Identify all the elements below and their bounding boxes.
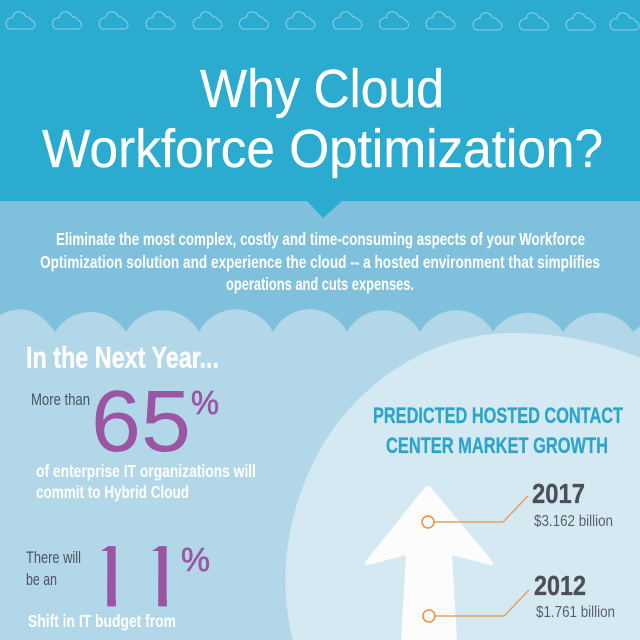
heading: predicted market growth (373, 403, 623, 458)
stat: 11 percent: % (181, 541, 210, 578)
callout: 2017: 2017 (532, 478, 585, 509)
stat: 65 percent: commit to Hybrid Cloud (36, 482, 189, 502)
stat: 11 percent: 1 (137, 529, 185, 625)
panel: scalloped cloud body (0, 309, 640, 640)
row of cloud icons (6, 12, 639, 30)
title (42, 59, 603, 179)
heading: in the next year: In the Next Year... (26, 342, 219, 374)
stat: 65 percent (31, 373, 256, 502)
intro paragraph: operations and cuts expenses. (226, 274, 414, 294)
panel: market growth circle (286, 333, 640, 640)
stat: 11 percent: Shift in IT budget from (28, 611, 176, 631)
icon: growth arrow (365, 486, 493, 640)
stat: 65 percent: % (191, 384, 219, 421)
callout: 2012: $1.761 billion (536, 604, 615, 621)
stat: 11 percent: There will (26, 548, 81, 567)
panel: intro band (0, 195, 640, 335)
stat: 11 percent: be an (26, 570, 57, 589)
stat: 65 percent: More than (31, 390, 90, 409)
callout: 2017 (422, 478, 613, 530)
intro paragraph (40, 229, 600, 294)
callout: 2012 (423, 570, 615, 622)
title: Workforce Optimization? (42, 119, 603, 179)
callout: 2012: 2012 (534, 570, 586, 601)
title: Why Cloud (200, 59, 444, 119)
panel: header band (0, 0, 640, 218)
stat: 11 percent (26, 529, 210, 631)
stat: 65 percent: of enterprise IT organizations will (36, 461, 256, 481)
stat: 65 percent: 65 (91, 373, 191, 470)
stat: 11 percent: 1 (86, 529, 134, 625)
callout: 2017: $3.162 billion (534, 513, 613, 530)
